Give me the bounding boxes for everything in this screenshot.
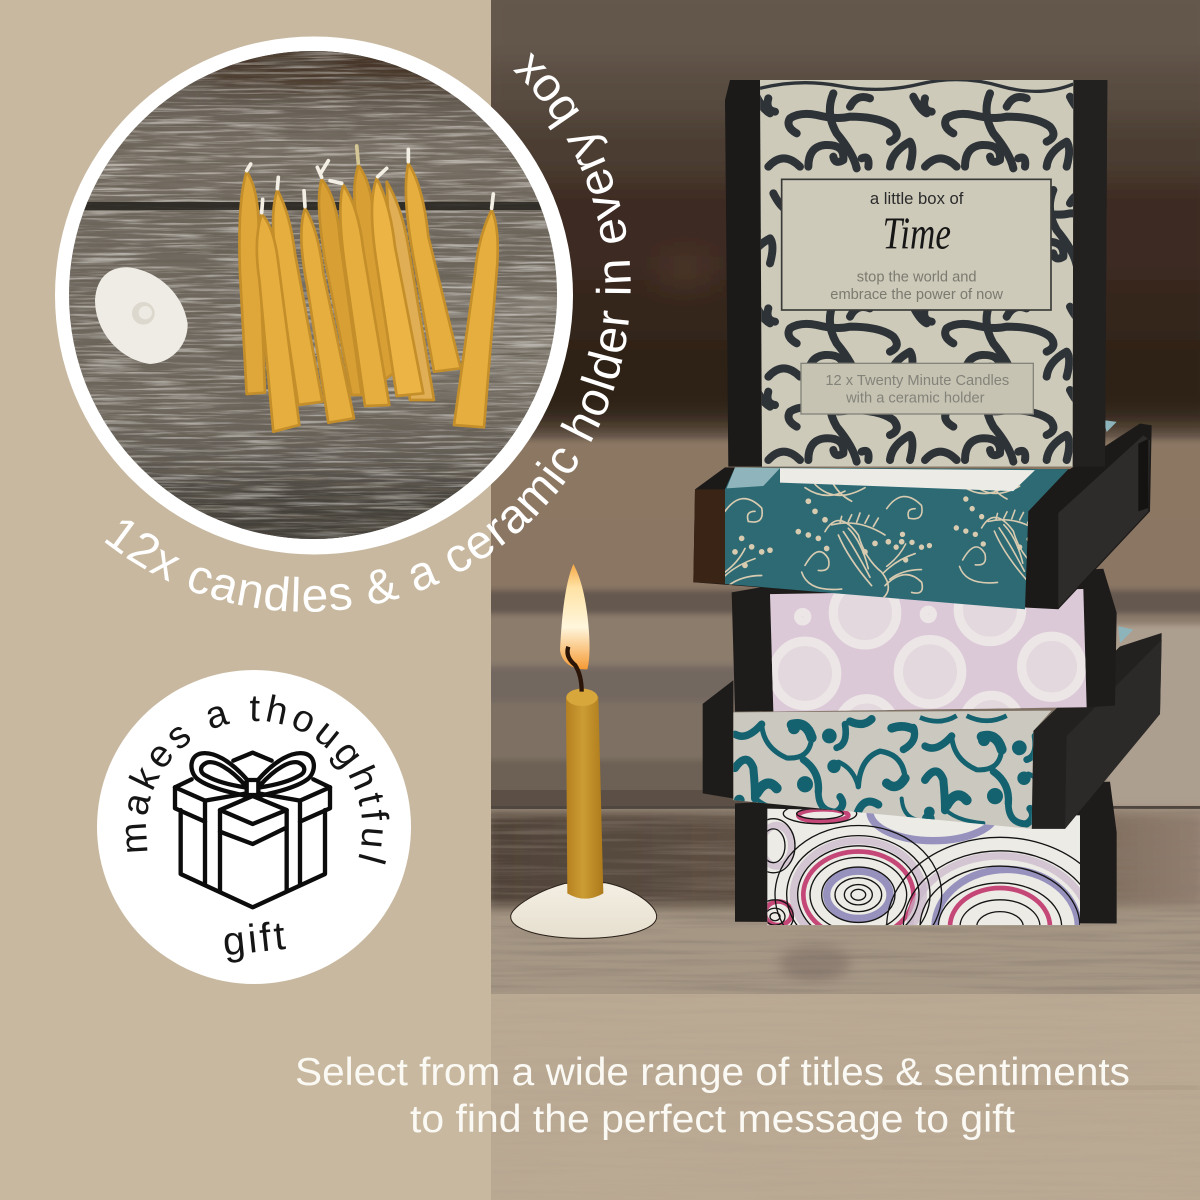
panel: round wood photo with white border	[55, 36, 573, 554]
box contents label: with a ceramic holder	[845, 391, 985, 407]
photo: lit beeswax candle in ceramic holder	[511, 564, 657, 938]
box label text: a little box of: a little box of	[870, 189, 964, 208]
box 4: teal swirl sleeve	[703, 626, 1162, 837]
caption: select from a wide range: Select from a wide range of titles & sentiments	[295, 1051, 1130, 1094]
beeswax candles	[239, 146, 498, 432]
badge curved text: makes a thoughtful	[126, 694, 390, 864]
ceramic holder, top view	[95, 267, 188, 364]
wick	[567, 647, 582, 692]
box contents label	[801, 363, 1033, 414]
caption: select from a wide range: to find the perfect message to gift	[410, 1098, 1015, 1141]
box 2: teal lace sleeve	[693, 420, 1152, 609]
box label panel	[782, 179, 1051, 310]
box 3: pink circle sleeve	[732, 568, 1117, 712]
box contents label: 12 x Twenty Minute Candles	[825, 373, 1009, 389]
table knot	[779, 946, 851, 980]
badge word: gift: gift	[221, 914, 290, 964]
box label tagline: stop the world and	[857, 269, 977, 285]
candle wicks	[247, 146, 493, 213]
caption: select from a wide range	[295, 1051, 1130, 1141]
flame	[560, 564, 590, 669]
photo: stacked gift boxes	[693, 80, 1162, 926]
box label tagline: embrace the power of now	[830, 287, 1003, 303]
panel: product photo background	[470, 0, 1200, 1200]
box label title: Time: Time	[883, 208, 951, 258]
curved caption around photo: 12x candles & a ceramic holder in every box	[104, 52, 631, 612]
box 1: Time sleeve front	[725, 80, 1108, 467]
badge: makes a thoughtful gift	[97, 670, 411, 984]
panel: tan left background	[0, 0, 491, 1200]
candle body	[566, 692, 603, 899]
gift icon	[175, 753, 330, 907]
box 5: rose swirl sleeve	[735, 782, 1117, 926]
holder	[511, 883, 657, 938]
